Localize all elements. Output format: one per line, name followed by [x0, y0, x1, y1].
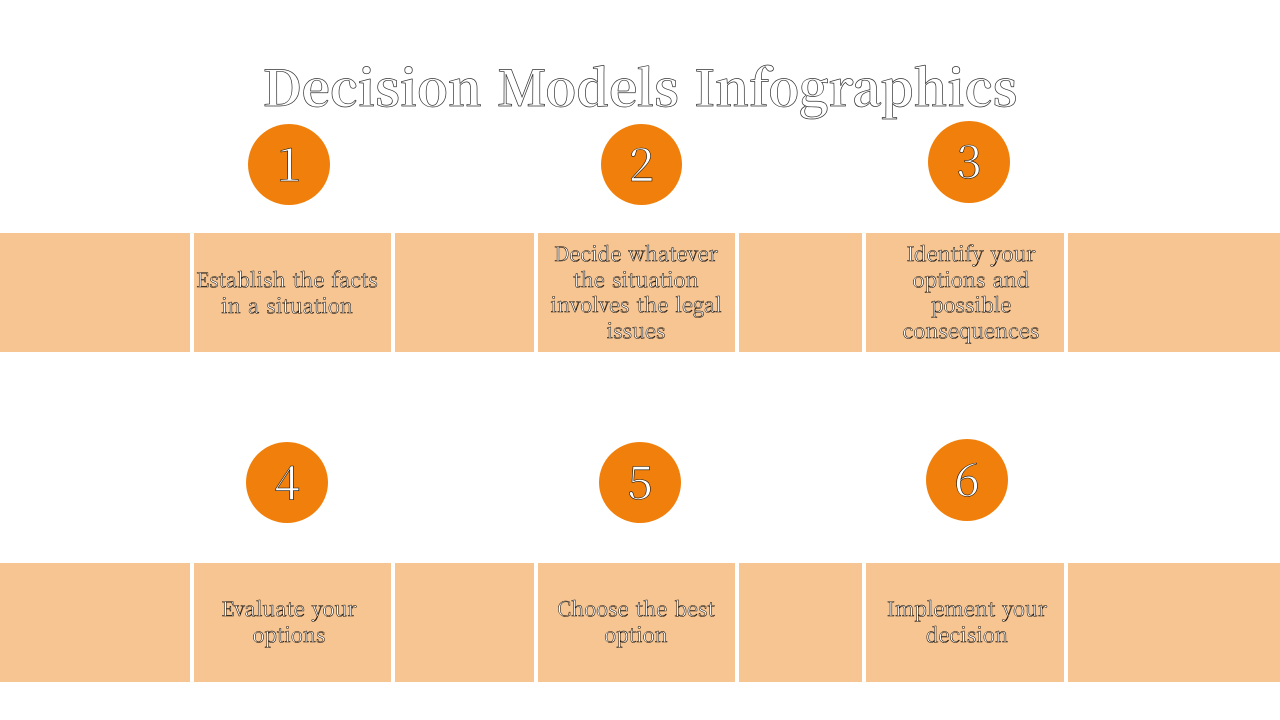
text: step 2: Decide whatever — [554, 238, 718, 267]
text: step 2: issues — [607, 315, 665, 344]
icon: number badge 1 — [248, 124, 330, 205]
text: step 4: options — [253, 619, 325, 648]
text: step 6: decision — [926, 619, 1008, 648]
icon: number badge 1: 1 — [276, 129, 302, 195]
text: step 3: Identify your — [906, 238, 1036, 267]
text: step 3: consequences — [903, 315, 1039, 344]
icon: number badge 6 — [926, 439, 1008, 521]
text: step 3 — [903, 238, 1039, 344]
text: step 1: in a situation — [221, 290, 353, 319]
icon: number badge 4 — [246, 442, 328, 523]
icon: number badge 3: 3 — [956, 126, 982, 192]
text: step 2: involves the legal — [550, 289, 722, 318]
title: Decision Models Infographics — [263, 50, 1017, 121]
text: step 1 — [196, 264, 378, 319]
text: step 1: Establish the facts — [196, 264, 378, 293]
panel: row 1 band — [0, 233, 1280, 352]
panel: row 2 band — [0, 563, 1280, 682]
icon: number badge 2 — [601, 124, 682, 205]
icon: number badge 4: 4 — [274, 447, 300, 513]
icon: number badge 6: 6 — [954, 444, 980, 510]
text: step 5: option — [604, 619, 668, 648]
text: step 6 — [887, 593, 1048, 648]
text: step 4: Evaluate your — [221, 593, 357, 622]
text: step 5 — [557, 593, 715, 648]
text: step 4 — [221, 593, 357, 648]
icon: number badge 5 — [599, 442, 681, 523]
text: step 2: the situation — [573, 264, 699, 293]
icon: number badge 5: 5 — [627, 447, 653, 513]
icon: number badge 3 — [928, 121, 1010, 203]
text: step 6: Implement your — [887, 593, 1047, 622]
text: step 3: possible — [931, 289, 1011, 318]
icon: number badge 2: 2 — [629, 129, 654, 195]
text: step 3: options and — [913, 264, 1029, 293]
text: step 5: Choose the best — [557, 593, 715, 622]
text: step 2 — [550, 238, 722, 344]
